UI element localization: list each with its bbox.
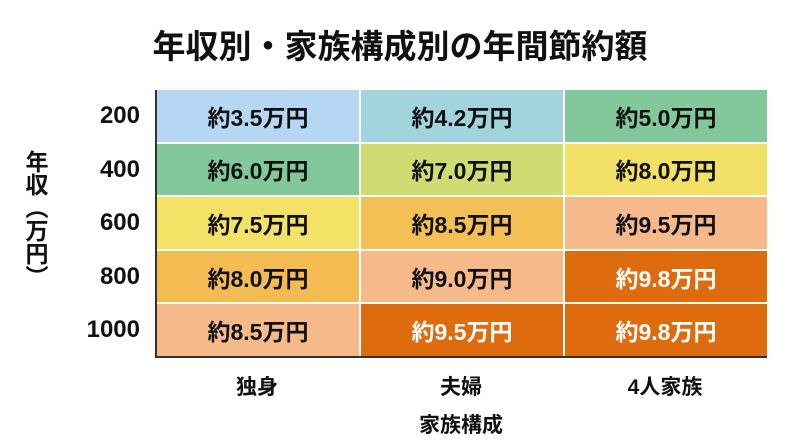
column labels: 4人家族 [628, 376, 702, 399]
heatmap grid: 約3.5万円 [208, 105, 308, 131]
heatmap grid: 約9.8万円 [616, 319, 716, 345]
heatmap grid: 約7.0万円 [412, 158, 512, 184]
column labels: 夫婦 [440, 376, 482, 399]
heatmap grid: 約9.0万円 [412, 266, 512, 292]
row labels [87, 102, 140, 343]
row labels: 400 [100, 156, 140, 183]
heatmap grid: 約5.0万円 [616, 105, 716, 131]
x axis label: 家族構成 [419, 414, 503, 437]
row labels: 1000 [87, 316, 140, 343]
heatmap grid: 約6.0万円 [208, 158, 308, 184]
heatmap grid: 約9.5万円 [412, 319, 512, 345]
heatmap grid: 約8.5万円 [208, 319, 308, 345]
heatmap grid: 約8.0万円 [208, 266, 308, 292]
heatmap grid: 約4.2万円 [412, 105, 512, 131]
y axis label: 年収（万円） [22, 150, 48, 288]
row labels: 600 [100, 209, 140, 236]
heatmap grid [155, 90, 767, 358]
heatmap grid: 約8.5万円 [412, 212, 512, 238]
column labels: 独身 [236, 376, 278, 399]
heatmap grid: 約9.5万円 [616, 212, 716, 238]
heatmap grid: 約8.0万円 [616, 158, 716, 184]
row labels: 200 [100, 102, 140, 129]
column labels [236, 376, 702, 399]
heatmap grid: 約7.5万円 [208, 212, 308, 238]
row labels: 800 [100, 263, 140, 290]
heatmap grid: 約9.8万円 [616, 266, 716, 292]
title: 年収別・家族構成別の年間節約額 [152, 28, 648, 65]
